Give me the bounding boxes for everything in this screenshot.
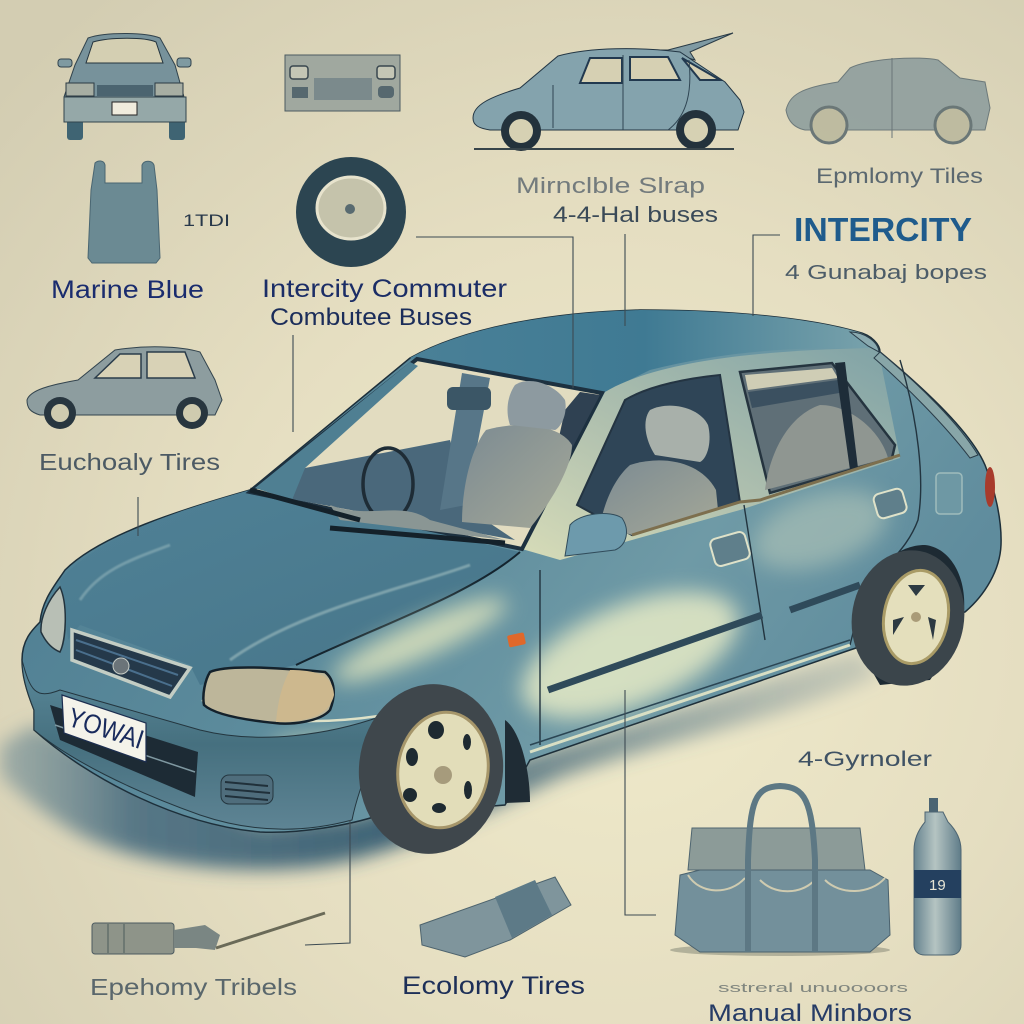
rear hatch strip [874,352,978,458]
water bottle [914,798,961,955]
small hatch side view [27,347,222,429]
tote bag icon [88,161,160,263]
front bumper [22,660,385,829]
front seat back [462,425,572,528]
roof [410,310,878,392]
label: 4-Gyrnoler: 4-Gyrnoler [798,748,932,771]
label: Epmlomy Tiles: Epmlomy Tiles [816,165,983,188]
faded sedan side view [786,58,990,143]
label: Marine Blue: Marine Blue [51,276,204,304]
label: Gunabaj bopes: 4 Gunabaj bopes [785,262,987,284]
water bottle: 19 [929,877,946,894]
label: Ecolomy Tires: Ecolomy Tires [402,972,585,1000]
fuel door [936,473,962,514]
car shadow [0,650,880,870]
duffel bag [670,786,890,956]
chrome strip [202,700,385,721]
turn indicator [507,632,526,648]
grille [72,630,190,697]
tail light [985,467,995,507]
roof spoiler [850,332,879,352]
label: faint caption: sstreral unuoooors [718,980,909,995]
seat back [600,460,718,535]
door lines [540,360,921,745]
label: Intercity Commuter: Intercity Commuter [262,275,507,303]
side moldings [530,585,860,752]
main car [22,310,1001,861]
lower intake [50,705,198,797]
window sill [632,455,900,535]
body highlights [80,475,897,757]
steering wheel [363,448,413,520]
label: 4-4-Hal buses: 4-4-Hal buses [553,202,718,227]
windshield [250,359,602,549]
seat headrest [645,406,710,462]
pillar [440,373,490,510]
front seat headrest [508,381,566,430]
small front view car [58,34,191,140]
folded fabric [420,877,571,957]
interior mirror [447,387,491,410]
door frame band [522,348,900,560]
label: Epehomy Tribels: Epehomy Tribels [90,974,297,1000]
leader lines [138,234,780,945]
a-pillar strip [255,362,418,500]
front wheel [351,677,511,861]
heading: INTERCITY: INTERCITY [794,211,972,248]
license plate: YOWAI [64,702,148,755]
fog vent [221,775,273,804]
label: Combutee Buses: Combutee Buses [270,304,472,331]
rear door window [740,362,895,493]
hatchback side view [473,33,744,151]
label: Euchoaly Tires: Euchoaly Tires [39,449,220,475]
grille part [285,55,400,111]
front door window [577,375,740,535]
interior dark panel [285,440,515,540]
label: Mirnclble Slrap: Mirnclble Slrap [516,173,705,198]
hood [60,490,520,685]
side mirror [565,514,626,556]
rear wheel [841,541,975,695]
spare tire [296,157,406,267]
hood edge line [296,552,520,665]
main headlamp [203,667,334,724]
door handles [709,487,908,567]
left headlamp [41,587,65,652]
wipers [250,490,505,543]
label: 1TDI: 1TDI [183,211,230,230]
mud flap [505,720,530,803]
car body shell [22,310,1001,832]
dashboard [330,505,505,540]
tool [92,913,325,954]
